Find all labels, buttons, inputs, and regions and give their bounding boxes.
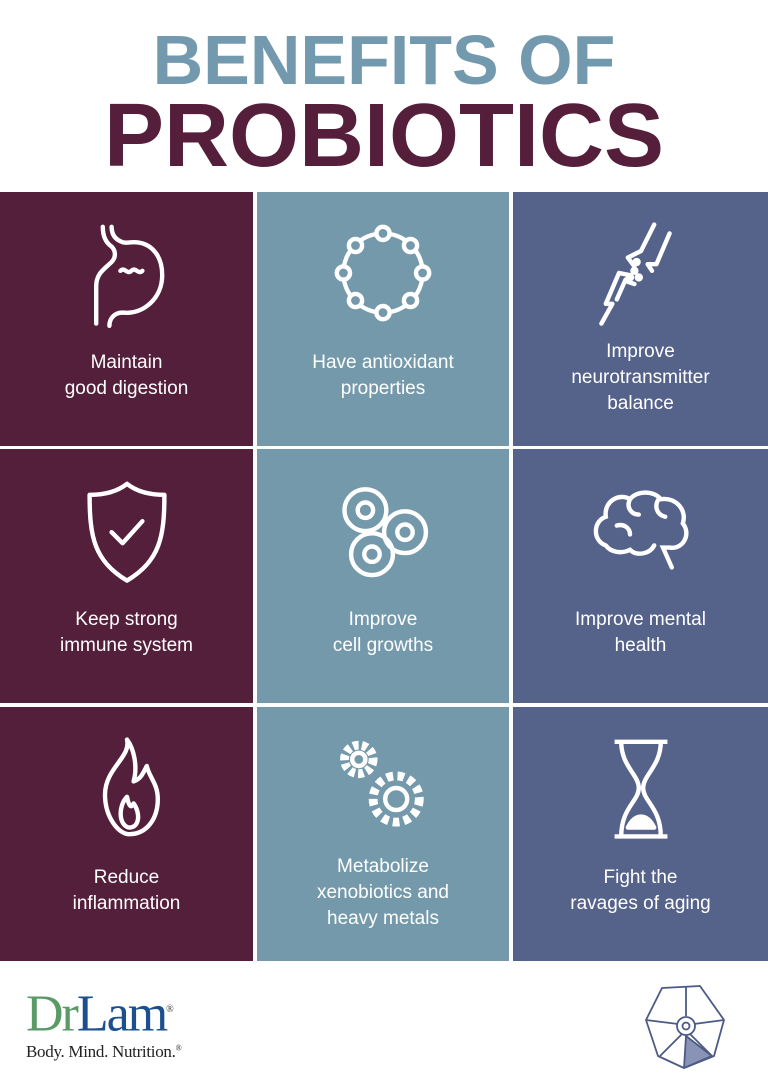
text: immune system — [60, 635, 193, 656]
text: ravages of aging — [570, 893, 711, 914]
text — [575, 609, 706, 656]
text: Have antioxidant — [312, 352, 454, 373]
icon: flame — [102, 737, 160, 836]
text: neurotransmitter — [571, 367, 710, 388]
panel: neurotransmitter — [513, 192, 768, 446]
panel: immune — [0, 449, 253, 703]
text: Improve mental — [575, 609, 706, 630]
logo: DrLam: Body. Mind. Nutrition.® — [26, 1042, 181, 1061]
panel: inflammation — [0, 707, 253, 961]
text — [60, 609, 193, 656]
text: xenobiotics and — [317, 882, 449, 903]
text — [73, 867, 180, 914]
icon: ring molecule — [334, 224, 432, 322]
text: Fight the — [604, 867, 677, 888]
text: cell growths — [333, 635, 433, 656]
panel: xenobiotics — [257, 707, 509, 961]
text — [570, 867, 711, 914]
text: balance — [607, 393, 674, 414]
text: Improve — [349, 609, 417, 630]
panel: mental health — [513, 449, 768, 703]
text: Improve — [606, 341, 675, 362]
text: health — [615, 635, 666, 656]
text: properties — [341, 378, 425, 399]
title: probiotics: PROBIOTICS — [104, 86, 664, 186]
icon: logo emblem — [645, 985, 725, 1069]
icon: hourglass — [614, 740, 668, 839]
title: BENEFITS OF — [153, 21, 615, 99]
panel: aging — [513, 707, 768, 961]
text: Metabolize — [337, 856, 429, 877]
panel: cell growth — [257, 449, 509, 703]
text — [65, 352, 188, 399]
text — [317, 856, 449, 929]
icon: shield — [87, 482, 167, 583]
text: good digestion — [65, 378, 188, 399]
logo: DrLam: DrLam® — [26, 985, 172, 1042]
text: Maintain — [91, 352, 162, 373]
panel: antioxidant — [257, 192, 509, 446]
panel: digestion — [0, 192, 253, 446]
text: heavy metals — [327, 908, 439, 929]
icon: stomach — [94, 224, 164, 328]
text — [571, 341, 710, 414]
icon: cells — [342, 487, 428, 578]
icon: brain — [594, 490, 689, 570]
icon: gears — [340, 740, 424, 826]
text — [312, 352, 454, 399]
text — [333, 609, 433, 656]
text: inflammation — [73, 893, 180, 914]
icon: synapse — [599, 222, 672, 326]
text: Keep strong — [75, 609, 178, 630]
text: Reduce — [94, 867, 159, 888]
